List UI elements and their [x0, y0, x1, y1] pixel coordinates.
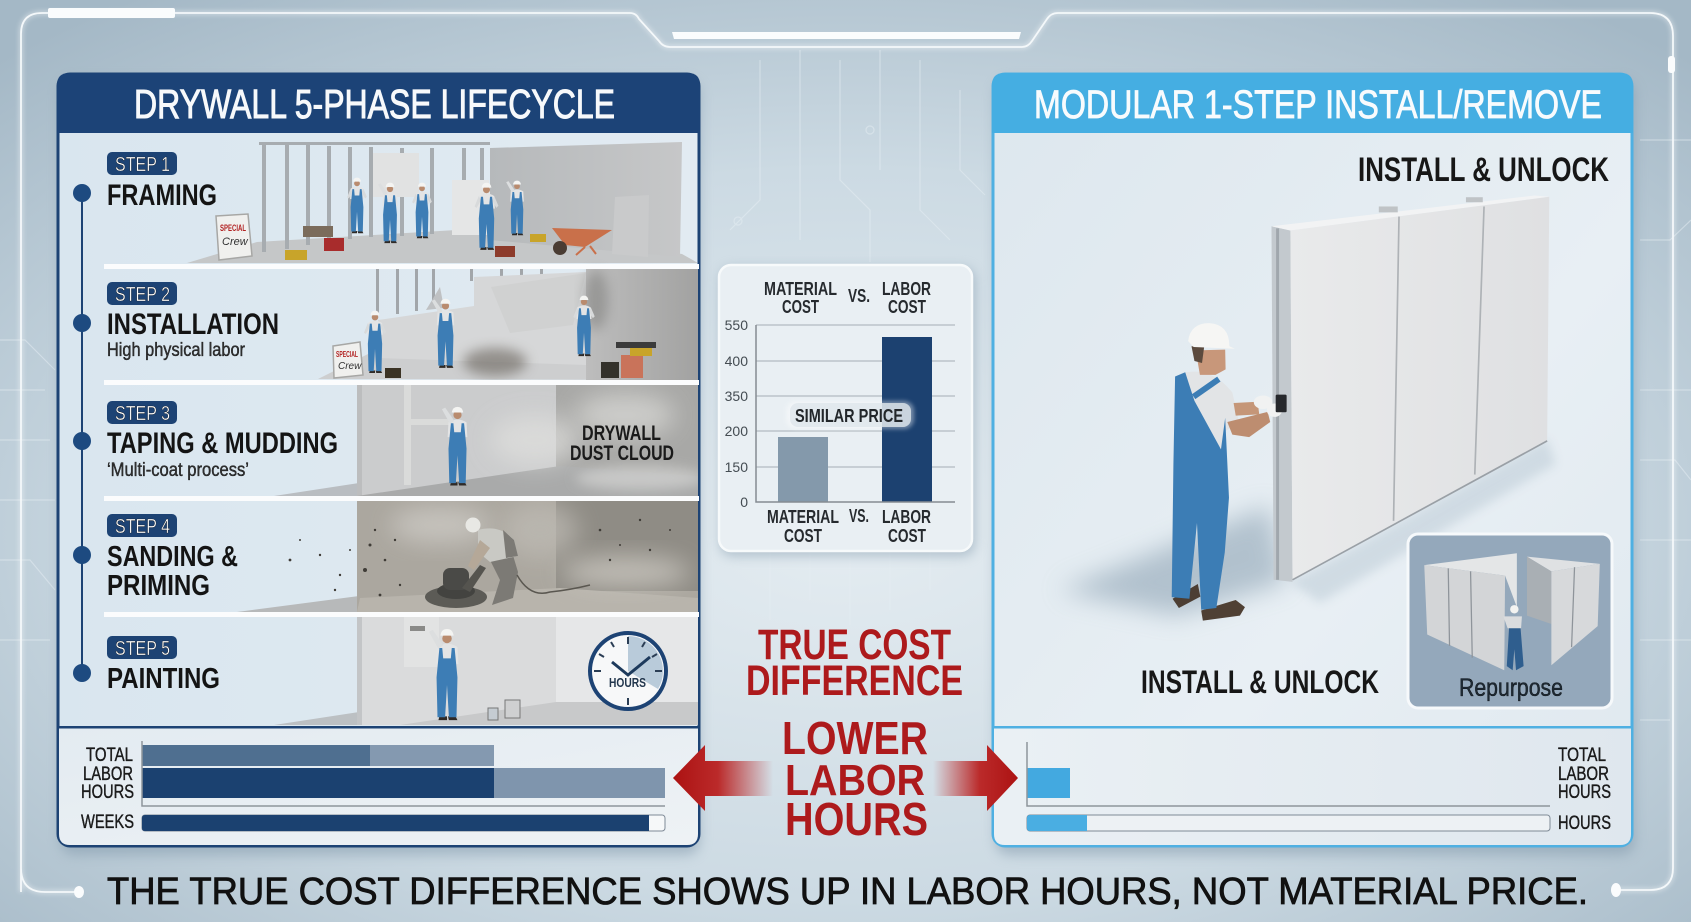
icon: wheelbarrow: [552, 228, 612, 255]
modular labor chart: [992, 726, 1633, 845]
icon: hours clock: [590, 633, 666, 709]
label: install and unlock bottom: INSTALL & UNLOCK: [1141, 664, 1379, 700]
heading: true cost difference: [746, 621, 963, 705]
step 2 illustration: installation: [318, 269, 700, 380]
step 4 text: PRIMING: [107, 570, 210, 602]
similar price callout: SIMILAR PRICE: [795, 406, 903, 426]
chart header labels: [764, 279, 931, 317]
step 3 text: ‘Multi-coat process’: [107, 460, 249, 481]
sign: special crew: Crew: [222, 236, 249, 248]
chart x-axis labels: [767, 506, 931, 546]
inset: repurpose: Repurpose: [1459, 674, 1563, 702]
bottom takeaway: THE TRUE COST DIFFERENCE SHOWS UP IN LABOR HOURS, NOT MATERIAL PRICE.: [107, 871, 1588, 913]
step 4 text: [107, 514, 238, 602]
modular panel header: [992, 73, 1633, 133]
modular labor chart: HOURS: [1558, 782, 1611, 803]
heading: true cost difference: TRUE COST: [758, 621, 951, 669]
icon: hours clock: HOURS: [609, 675, 646, 690]
chart x-axis labels: VS.: [849, 506, 869, 526]
inset: repurpose: [1408, 534, 1612, 708]
step 2 text: STEP 2: [115, 284, 170, 306]
illustration: worker at modular wall: [1059, 196, 1556, 621]
modular labor chart: LABOR: [1558, 764, 1609, 785]
label: drywall dust cloud: DRYWALL: [582, 422, 661, 445]
y-axis values: 200: [725, 423, 748, 439]
heading: lower labor hours: [782, 712, 928, 845]
row dividers: [104, 264, 699, 617]
step 4 text: SANDING &: [107, 541, 238, 573]
step 2 text: [107, 282, 279, 361]
modular labor chart: TOTAL: [1558, 745, 1606, 766]
chart header labels: MATERIAL: [764, 279, 837, 299]
y-axis values: 150: [725, 459, 748, 475]
sign: special crew: [216, 214, 252, 260]
step 1 text: FRAMING: [107, 179, 217, 212]
chart x-axis labels: COST: [784, 526, 822, 546]
sign: special crew: Crew: [338, 361, 362, 372]
heading: true cost difference: DIFFERENCE: [746, 657, 963, 705]
step 4 text: STEP 4: [115, 516, 170, 538]
modular labor chart: HOURS: [1558, 813, 1611, 834]
bar: material cost: [778, 437, 828, 502]
circuit pattern background: [0, 50, 1691, 720]
step 1 text: STEP 1: [115, 154, 170, 176]
step 5 text: PAINTING: [107, 663, 220, 695]
worker: [1172, 323, 1287, 621]
drywall labor chart: TOTAL: [86, 745, 133, 766]
chart x-axis labels: LABOR: [882, 507, 931, 527]
y-axis values: [725, 317, 748, 510]
modular wall: [1271, 196, 1549, 582]
step 3 text: STEP 3: [115, 403, 170, 425]
label: drywall dust cloud: DUST CLOUD: [570, 442, 674, 465]
arrow: left: [673, 745, 773, 811]
drywall labor chart: LABOR: [83, 764, 133, 785]
label: install and unlock top: INSTALL & UNLOCK: [1358, 151, 1609, 189]
step 5 illustration: painting: [274, 617, 698, 725]
step 3 illustration: taping and mudding: [274, 385, 705, 496]
heading: lower labor hours: HOURS: [785, 793, 928, 845]
timeline spine: [73, 184, 91, 682]
chart x-axis labels: MATERIAL: [767, 507, 839, 527]
machine: [601, 342, 656, 378]
panel: drywall lifecycle: [57, 73, 705, 855]
step 3 text: [107, 401, 338, 481]
step 2 text: INSTALLATION: [107, 308, 279, 341]
step 5 text: STEP 5: [115, 638, 170, 660]
worker with floor sander: [425, 518, 590, 608]
chart x-axis labels: COST: [888, 526, 926, 546]
drywall panel header: DRYWALL 5-PHASE LIFECYCLE: [134, 81, 615, 127]
similar price callout: [786, 401, 914, 429]
drywall labor chart: WEEKS: [81, 812, 134, 833]
step 1 text: [107, 152, 217, 212]
step 1 illustration: framing: [187, 142, 698, 263]
chart header labels: VS.: [848, 286, 870, 306]
chart header labels: COST: [888, 297, 926, 317]
chart header labels: LABOR: [882, 279, 931, 299]
bar: labor cost: [882, 337, 932, 502]
grid lines and axes: [756, 325, 955, 467]
drywall panel header: [57, 73, 700, 133]
heading: lower labor hours: LABOR: [785, 756, 925, 805]
y-axis values: 550: [725, 317, 748, 333]
y-axis values: 400: [725, 353, 748, 369]
heading: lower labor hours: LOWER: [782, 712, 928, 764]
y-axis values: 0: [740, 494, 748, 510]
sign: special crew: SPECIAL: [220, 223, 246, 233]
sign: special crew: [333, 342, 363, 378]
drywall labor chart: [57, 726, 700, 845]
step 3 text: TAPING & MUDDING: [107, 427, 338, 460]
y-axis values: 350: [725, 388, 748, 404]
material vs labor cost chart: [719, 265, 975, 556]
step 4 illustration: sanding and priming: [237, 501, 698, 612]
drywall labor chart: HOURS: [81, 782, 134, 803]
sign: special crew: SPECIAL: [336, 350, 358, 359]
arrow: right: [933, 745, 1018, 811]
label: drywall dust cloud: [570, 422, 674, 465]
step 5 text: [107, 636, 220, 695]
panel: modular install: [992, 73, 1635, 855]
chart header labels: COST: [782, 297, 819, 317]
step 2 text: High physical labor: [107, 340, 246, 361]
